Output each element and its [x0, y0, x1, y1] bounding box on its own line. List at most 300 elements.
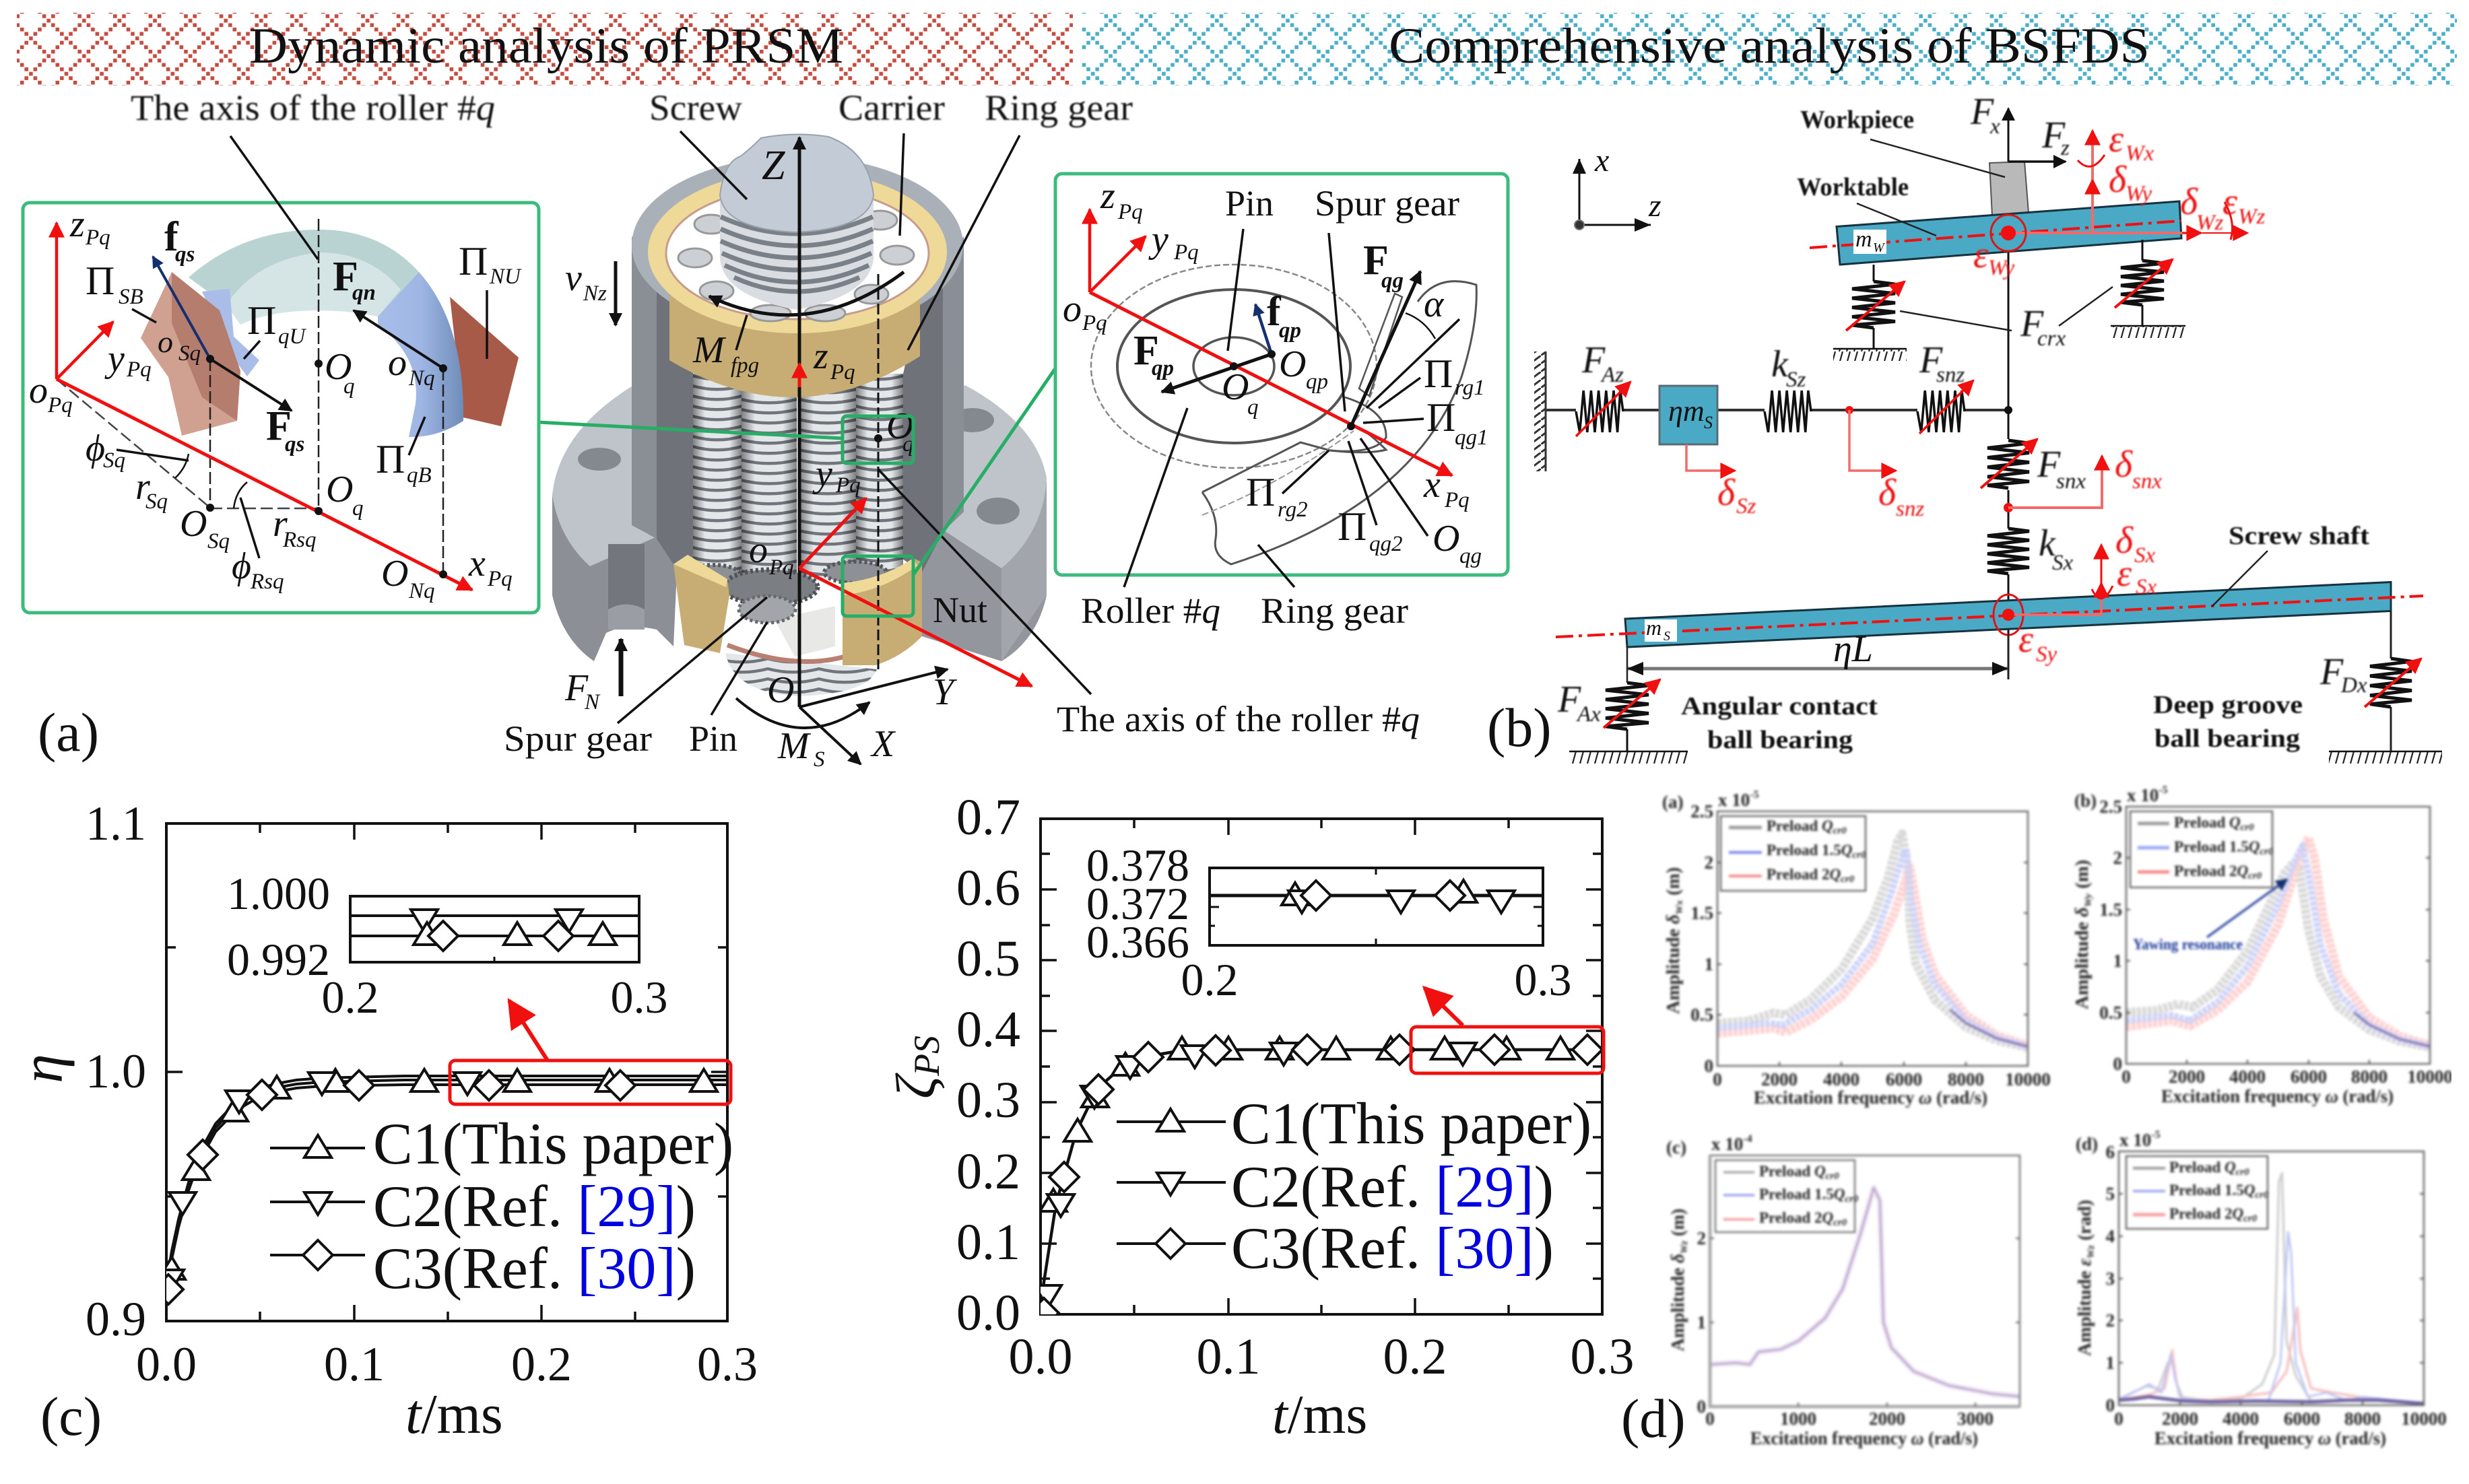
- labels on assembly: q: [902, 432, 913, 457]
- symbols of the gear mesh detail: Pq: [1444, 488, 1470, 512]
- symbols of the gear mesh detail: qp: [1279, 318, 1301, 343]
- top labels of the PRSM assembly: Screw: [649, 88, 742, 128]
- symbols of the thread contact detail: O: [326, 469, 353, 510]
- labels: Preload 1.5Q: [1767, 842, 1852, 858]
- model labels black: F: [2042, 114, 2065, 156]
- axes, forces and construction lines: [57, 136, 487, 590]
- force arrows Fx Fz: [1857, 108, 2113, 331]
- axis tick labels: 0.0: [956, 1285, 1020, 1341]
- red zoom box and arrow: [450, 1001, 731, 1104]
- labels: Yawing resonance: [2133, 936, 2243, 953]
- symbols of the gear mesh detail: qp: [1306, 370, 1328, 394]
- labels: 1: [1704, 954, 1713, 974]
- gears, pin and lower screw: [673, 555, 922, 696]
- labels: cr0: [2260, 846, 2274, 857]
- labels: [2074, 1129, 2447, 1448]
- labels: Wz: [1679, 1241, 1690, 1254]
- labels: cr0: [1833, 1217, 1847, 1228]
- markers C1: [1042, 1034, 1576, 1213]
- panel (b): BSFDS dynamic model: [1487, 91, 2442, 764]
- yawing resonance arrow: [2207, 879, 2287, 937]
- labels: cr0: [2255, 1190, 2269, 1201]
- inset zoom plot: [1086, 840, 1572, 1005]
- legend: C1(This paper): [373, 1112, 733, 1177]
- labels: cr0: [1833, 825, 1847, 836]
- symbols of the thread contact detail: Pq: [85, 226, 110, 250]
- panel tag (d): (d): [1621, 1388, 1686, 1449]
- labels on assembly: O: [886, 405, 913, 447]
- labels: 8000: [1948, 1069, 1984, 1089]
- axis tick labels: 0.3: [697, 1337, 758, 1391]
- symbols of the thread contact detail: [29, 203, 522, 603]
- markers C1: [158, 1069, 717, 1279]
- labels: (c): [1666, 1137, 1686, 1157]
- symbols of the thread contact detail: q: [343, 374, 354, 399]
- carrier and ring gear: [632, 156, 963, 397]
- symbols of the thread contact detail: qs: [175, 242, 195, 267]
- model labels black: Az: [1600, 363, 1624, 387]
- model labels black: Worktable: [1797, 173, 1909, 201]
- labels on assembly: Nz: [583, 281, 607, 306]
- labels: 3: [2105, 1269, 2115, 1289]
- symbols of the thread contact detail: qs: [285, 432, 304, 457]
- symbols of the thread contact detail: q: [352, 496, 364, 520]
- symbols of the thread contact detail: Sq: [207, 529, 230, 553]
- symbols of the gear mesh detail: qg2: [1369, 532, 1402, 556]
- model labels red: Wx: [2126, 141, 2154, 166]
- legend: C2(Ref. [29]): [1231, 1155, 1554, 1220]
- labels: x 10: [1711, 1134, 1743, 1154]
- symbols of the thread contact detail: o: [158, 325, 173, 359]
- labels: 2: [1697, 1228, 1706, 1248]
- labels: Amplitude δ: [1668, 1254, 1688, 1351]
- axis tick labels: 0.2: [1383, 1328, 1447, 1385]
- axis tick labels: 0.3: [956, 1072, 1020, 1128]
- model labels red: Sx: [2136, 575, 2157, 599]
- y axis title zeta PS: ζ: [885, 1076, 948, 1099]
- symbols of the gear mesh detail: qg1: [1455, 426, 1488, 450]
- model labels black: crx: [2037, 327, 2066, 351]
- labels: Excitation frequency ω (rad/s): [1754, 1087, 1987, 1108]
- axes and dashed roller axis: [616, 131, 1091, 764]
- labels: cr0: [1826, 1171, 1839, 1182]
- labels on assembly: y: [816, 453, 832, 495]
- model labels black: Angular contact: [1681, 692, 1878, 720]
- curves C1 C2 C3: [166, 1076, 727, 1291]
- labels: Preload 2Q: [1767, 866, 1841, 883]
- labels: cr0: [2236, 1167, 2249, 1178]
- symbols of the thread contact detail: F: [333, 254, 358, 300]
- symbols of the gear mesh detail: Pq: [1117, 200, 1143, 224]
- labels on assembly: Nut: [933, 590, 987, 630]
- curves: [2126, 838, 2430, 1048]
- labels on assembly: fpg: [731, 353, 759, 378]
- model labels black: [1557, 91, 2369, 754]
- model labels red: ε: [2117, 553, 2132, 595]
- model labels red: Sy: [2036, 642, 2057, 667]
- model labels red: δ: [1878, 472, 1896, 514]
- top labels of the PRSM assembly: Ring gear: [985, 88, 1133, 128]
- labels on assembly: F: [565, 667, 588, 709]
- axis tick labels: 0.5: [956, 931, 1020, 987]
- labels on assembly: o: [749, 529, 768, 571]
- panel: gear mesh detail: [1055, 174, 1508, 631]
- inset zoom plot: 1.000: [227, 868, 330, 919]
- symbols of the gear mesh detail: Pq: [1173, 240, 1199, 265]
- header band: Dynamic analysis of PRSM: [17, 13, 1073, 86]
- symbols of the gear mesh detail: Π: [1424, 351, 1453, 396]
- symbols of the thread contact detail: Rsq: [282, 528, 317, 552]
- labels: 0: [2105, 1395, 2115, 1415]
- labels: 2000: [1761, 1069, 1798, 1089]
- symbols of the thread contact detail: O: [180, 503, 207, 545]
- axis tick labels: [86, 797, 758, 1391]
- panel (a): PRSM structure and contact model: [23, 88, 1508, 772]
- labels: Amplitude δ: [1663, 915, 1683, 1014]
- inset zoom plot: 0.378: [1086, 840, 1189, 891]
- subplot (c): amplitude delta Wz: [1666, 1133, 2020, 1448]
- markers C3: [1029, 1035, 1602, 1328]
- labels: 0: [2121, 1067, 2131, 1087]
- deep groove bearing spring: [2329, 611, 2442, 764]
- model labels red: Wz: [2238, 205, 2265, 229]
- worktable mass label: [1853, 227, 1886, 255]
- gear outlines: [1091, 265, 1476, 564]
- model labels red: δ: [1717, 472, 1735, 514]
- subplot (b): amplitude delta Wy: [2072, 784, 2453, 1106]
- legend: C3(Ref. [30]): [373, 1236, 696, 1302]
- symbols of the gear mesh detail: O: [1279, 343, 1306, 385]
- axis tick labels: 1.1: [86, 797, 146, 850]
- labels: 0: [1705, 1409, 1715, 1429]
- model labels red: snz: [1896, 497, 1924, 521]
- plot frame and ticks: [1041, 819, 1602, 1314]
- labels: cr0: [1845, 1194, 1859, 1205]
- symbols of the gear mesh detail: qp: [1152, 356, 1174, 380]
- symbols of the thread contact detail: Sq: [103, 448, 125, 473]
- labels: 1: [1697, 1312, 1706, 1333]
- symbols of the thread contact detail: qn: [352, 281, 376, 305]
- labels: (b): [2074, 790, 2097, 811]
- frame, ticks and legend: [2126, 807, 2430, 1064]
- symbols of the thread contact detail: o: [388, 342, 407, 384]
- legend: C2(Ref. [29]): [373, 1174, 696, 1240]
- panel tag (a): (a): [38, 702, 99, 763]
- symbols of the thread contact detail: SB: [119, 285, 143, 309]
- curves: [1717, 834, 2028, 1048]
- symbols of the gear mesh detail: O: [1222, 366, 1249, 408]
- labels on assembly: Pq: [768, 555, 794, 580]
- screw with threads: [720, 134, 874, 310]
- axis tick labels: 0.1: [1196, 1328, 1261, 1385]
- dimension eta L: ηL: [1833, 628, 1873, 670]
- labels on assembly: O: [767, 669, 794, 711]
- symbols of the thread contact detail: Π: [247, 298, 276, 343]
- labels: (d): [2076, 1134, 2098, 1154]
- symbols of the gear mesh detail: rg1: [1455, 376, 1485, 400]
- symbols of the thread contact detail: O: [325, 346, 352, 388]
- flange of nut: [552, 385, 1047, 661]
- symbols of the thread contact detail: r: [273, 503, 288, 545]
- symbols of the thread contact detail: x: [469, 543, 486, 584]
- labels: 2: [2105, 1310, 2115, 1330]
- axes, forces and leaders: [1090, 209, 1459, 587]
- screw shaft: [1625, 582, 2391, 647]
- labels on assembly: Y: [933, 671, 958, 713]
- labels: 2.5: [1690, 801, 1713, 821]
- model labels red: δ: [2115, 520, 2133, 562]
- labels on assembly: Z: [762, 143, 785, 189]
- symbols of the gear mesh detail: Pq: [1082, 311, 1107, 335]
- labels: (m): [1668, 1209, 1688, 1241]
- labels: 6000: [2291, 1067, 2327, 1087]
- labels: Excitation frequency ω (rad/s): [1750, 1428, 1978, 1448]
- axis tick labels: 0.2: [511, 1337, 572, 1391]
- coordinate axes x z: [1573, 143, 1661, 232]
- model labels red: ε: [2109, 119, 2124, 160]
- frame, ticks and legend: [1710, 1155, 2020, 1407]
- markers C3: [154, 1071, 635, 1304]
- inset zoom plot: 0.2: [1181, 954, 1238, 1005]
- threaded rollers: [693, 374, 903, 579]
- model labels red: δ: [2109, 159, 2126, 201]
- symbols of the gear mesh detail: f: [1267, 289, 1281, 335]
- panel tag (c): (c): [40, 1386, 102, 1447]
- labels: [2072, 784, 2453, 1106]
- top labels of the PRSM assembly: Carrier: [838, 88, 945, 128]
- labels: Preload Q: [2169, 1159, 2236, 1176]
- curves: [2119, 1173, 2424, 1403]
- model labels black: Sz: [1786, 368, 1806, 392]
- model labels black: F: [1919, 339, 1942, 381]
- model labels black: ball bearing: [1707, 726, 1853, 754]
- inset zoom plot: 0.372: [1086, 878, 1189, 929]
- curve: [1041, 1050, 1602, 1304]
- worktable red displacement axes: [1810, 131, 2247, 251]
- symbols of the thread contact detail: qB: [407, 463, 432, 487]
- labels: (m): [2072, 860, 2092, 893]
- inset zoom plot: 0.2: [322, 972, 378, 1023]
- axis tick labels: [956, 789, 1634, 1385]
- heading: Dynamic analysis of PRSM: Dynamic analysis of PRSM: [249, 18, 843, 74]
- plot frame and ticks: [166, 823, 727, 1321]
- inset zoom plot: 0.992: [227, 934, 330, 985]
- y axis title eta: η: [10, 1054, 75, 1083]
- labels: [1666, 1133, 1994, 1448]
- labels: 1: [2105, 1353, 2115, 1373]
- labels on assembly: Pin: [689, 718, 737, 759]
- markers C2: [1034, 1043, 1476, 1308]
- model labels black: snz: [1936, 363, 1965, 387]
- symbols of the thread contact detail: F: [266, 403, 292, 449]
- red displacement arrows on chain: [1686, 410, 1896, 471]
- labels: 5: [2105, 1184, 2115, 1204]
- labels: 0: [2113, 1054, 2122, 1074]
- labels: (m): [1663, 867, 1683, 900]
- symbols of the gear mesh detail: O: [1433, 518, 1459, 560]
- model labels red: Wy: [1988, 256, 2014, 280]
- 3D cutaway illustration of the roller screw: [504, 131, 1420, 772]
- labels on assembly: Pq: [835, 473, 861, 498]
- labels: x 10: [2119, 1130, 2151, 1150]
- labels: 2: [2113, 848, 2122, 868]
- labels: (rad): [2074, 1200, 2095, 1245]
- panel (d): frequency response charts: [1621, 784, 2469, 1449]
- symbols of the thread contact detail: Nq: [408, 366, 435, 391]
- labels on assembly: [504, 143, 1420, 772]
- axis tick labels: 0.0: [136, 1337, 197, 1391]
- symbols of the thread contact detail: f: [164, 214, 178, 260]
- symbols of the thread contact detail: Pq: [487, 567, 513, 591]
- shaft red axes: [1556, 545, 2423, 637]
- labels: Excitation frequency ω (rad/s): [2154, 1428, 2386, 1448]
- model labels black: F: [2037, 444, 2060, 485]
- labels: 4000: [2229, 1067, 2266, 1087]
- labels: -5: [2151, 1129, 2161, 1141]
- labels on assembly: v: [565, 257, 582, 299]
- symbols of the thread contact detail: Sq: [178, 341, 201, 366]
- model labels black: F: [2020, 303, 2043, 345]
- labels: 0: [1697, 1396, 1706, 1417]
- labels: cr0: [1841, 874, 1855, 885]
- labels: 1.5: [2099, 900, 2122, 920]
- symbols of the gear mesh detail: Ring gear: [1261, 591, 1408, 631]
- right edge crop mask over the cut off tick label: [2451, 1071, 2469, 1091]
- model labels black: k: [1771, 343, 1788, 385]
- worktable: [1837, 201, 2181, 265]
- symbols of the thread contact detail: Π: [459, 239, 488, 283]
- axis tick labels: 0.9: [86, 1292, 146, 1346]
- worktable mass label: m: [1855, 227, 1872, 252]
- labels: 4000: [1823, 1069, 1859, 1089]
- model labels black: F: [1582, 339, 1605, 381]
- labels: (a): [1662, 792, 1683, 812]
- model labels red: snx: [2132, 469, 2162, 494]
- axis tick labels: 0.1: [956, 1214, 1020, 1271]
- model labels red: ε: [2018, 619, 2033, 661]
- model labels black: F: [2320, 651, 2343, 693]
- labels on assembly: Pq: [830, 360, 855, 384]
- labels on assembly: The axis of the roller # q: [1057, 699, 1420, 739]
- labels: Preload 2Q: [1759, 1209, 1833, 1226]
- labels: 1.5: [1690, 903, 1713, 923]
- coordinate axes x z: z: [1648, 188, 1661, 224]
- labels: 8000: [2351, 1067, 2388, 1087]
- symbols of the gear mesh detail: x: [1424, 464, 1441, 506]
- shaft mass label: S: [1664, 629, 1670, 644]
- model labels black: Ax: [1576, 702, 1601, 727]
- top labels of the PRSM assembly: The axis of the roller # q: [131, 88, 495, 128]
- symbols of the gear mesh detail: Roller #q: [1081, 591, 1220, 631]
- worktable support spring right: [2111, 240, 2185, 338]
- worktable support spring left: [1833, 265, 1907, 361]
- labels: x 10: [1718, 790, 1750, 810]
- axis tick labels: 0.6: [956, 860, 1020, 916]
- axis tick labels: 0.1: [324, 1337, 385, 1391]
- symbols of the thread contact detail: ϕ: [232, 545, 251, 587]
- labels: -5: [1750, 789, 1759, 801]
- labels: x 10: [2127, 785, 2159, 805]
- symbols of the gear mesh detail: α: [1424, 283, 1445, 325]
- labels: Preload 1.5Q: [2169, 1182, 2255, 1199]
- inset zoom plot: 0.366: [1086, 916, 1189, 968]
- labels: cr0: [2243, 1213, 2258, 1224]
- axis tick labels: 0.4: [956, 1001, 1020, 1058]
- labels: -4: [1743, 1133, 1752, 1145]
- labels: -5: [2159, 784, 2168, 796]
- central vertical line: [2007, 108, 2010, 679]
- chart: eta versus time: [10, 797, 758, 1446]
- labels: 0: [1713, 1069, 1722, 1089]
- labels: 0: [1704, 1056, 1713, 1076]
- model labels red: Wy: [2126, 182, 2152, 206]
- labels: Wy: [2083, 893, 2094, 907]
- model labels red: Sz: [1736, 494, 1756, 518]
- labels: 10000: [2407, 1067, 2453, 1087]
- labels: 2000: [2169, 1067, 2205, 1087]
- labels: 1: [2113, 951, 2122, 971]
- labels: cr0: [1852, 850, 1866, 861]
- symbols of the gear mesh detail: qg: [1459, 544, 1482, 568]
- heading: Comprehensive analysis of BSFDS: Comprehensive analysis of BSFDS: [1389, 18, 2150, 74]
- symbols of the gear mesh detail: F: [1363, 238, 1389, 283]
- symbols of the gear mesh detail: qg: [1381, 269, 1404, 293]
- horizontal spring chain: [1534, 351, 2012, 471]
- labels: 0: [2114, 1409, 2124, 1429]
- labels: cr0: [2241, 822, 2254, 833]
- x axis title: t/ms: [405, 1383, 503, 1446]
- inset zoom plot: 0.3: [610, 972, 668, 1023]
- axis tick labels: 0.3: [1571, 1328, 1634, 1385]
- screw shaft leader: [2212, 551, 2268, 607]
- labels: 10000: [2401, 1409, 2447, 1429]
- labels: 6000: [1886, 1069, 1922, 1089]
- subplot (a): amplitude delta Wx: [1662, 789, 2051, 1108]
- labels on assembly: Spur gear: [504, 718, 652, 759]
- symbols of the gear mesh detail: Π: [1246, 470, 1275, 514]
- nut cylinder walls: [632, 236, 964, 572]
- labels: Amplitude ε: [2074, 1258, 2095, 1356]
- inset zoom plot: 0.3: [1514, 954, 1572, 1005]
- symbols of the thread contact detail: z: [70, 203, 85, 245]
- labels: Preload Q: [1759, 1163, 1826, 1180]
- labels: 0.5: [2099, 1003, 2122, 1023]
- labels: 4000: [2223, 1409, 2259, 1429]
- model labels black: k: [2039, 522, 2055, 564]
- model labels red: [1717, 119, 2265, 667]
- frame, ticks and legend: [1717, 811, 2028, 1066]
- labels: 2000: [2162, 1409, 2198, 1429]
- labels: 3000: [1957, 1409, 1994, 1429]
- model labels black: ball bearing: [2154, 724, 2300, 753]
- model labels black: x: [1989, 114, 2000, 139]
- labels on assembly: M: [778, 725, 810, 767]
- legend: [1117, 1091, 1591, 1281]
- labels: 1000: [1780, 1409, 1816, 1429]
- symbols of the thread contact detail: o: [29, 370, 48, 411]
- labels on assembly: z: [814, 335, 828, 377]
- labels: 8000: [2344, 1409, 2381, 1429]
- symbols of the thread contact detail: qU: [278, 325, 307, 349]
- symbols of the thread contact detail: Pq: [126, 358, 152, 382]
- symbols of the gear mesh detail: y: [1152, 219, 1168, 261]
- roller thread surfaces: [141, 230, 519, 437]
- model labels red: ε: [2223, 181, 2237, 223]
- labels on assembly: X: [870, 723, 896, 765]
- horizontal spring chain: S: [1704, 413, 1713, 432]
- model labels red: Sx: [2134, 543, 2155, 568]
- labels on assembly: S: [814, 747, 824, 772]
